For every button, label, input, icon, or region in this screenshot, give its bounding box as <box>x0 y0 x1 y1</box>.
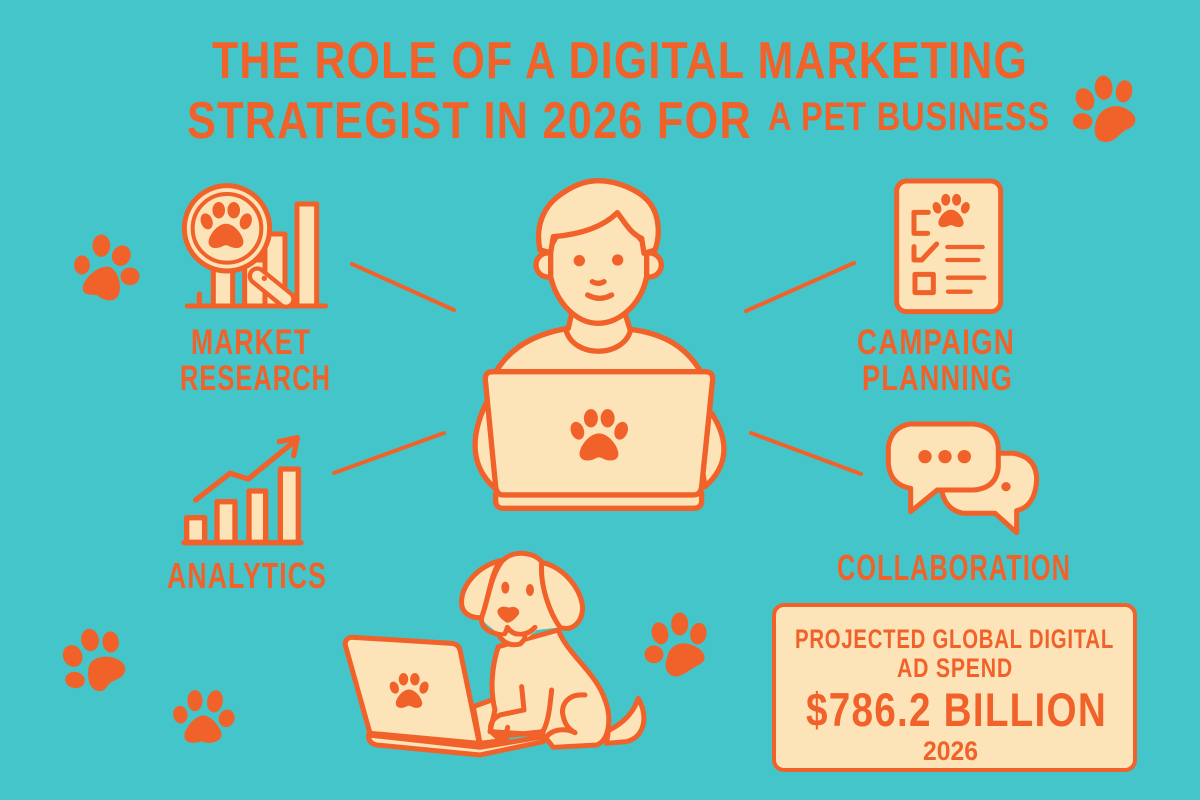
label: campaign planning <box>857 323 1015 398</box>
title: STRATEGIST IN 2026 FOR <box>187 92 752 150</box>
icon: market research <box>184 186 326 306</box>
callout: projected global digital ad spend: 2026 <box>923 736 978 766</box>
callout: projected global digital ad spend: AD SPEND <box>897 653 1013 683</box>
label: market research: RESEARCH <box>180 359 331 398</box>
label: campaign planning: CAMPAIGN <box>857 323 1015 362</box>
illustration: dog with laptop <box>345 553 644 755</box>
icon: collaboration speech bubbles <box>888 424 1037 533</box>
icon: strategist at laptop <box>475 181 724 508</box>
connector lines <box>334 263 861 474</box>
callout: projected global digital ad spend: $786.2 BILLION <box>806 683 1107 736</box>
label: analytics: ANALYTICS <box>167 555 327 596</box>
icon: paw bottom left large <box>60 628 125 691</box>
icon: paw beside dog <box>645 613 708 676</box>
label: market research: MARKET <box>191 323 311 362</box>
label: market research <box>180 323 331 398</box>
icon: paw top right <box>1073 75 1135 142</box>
icon: paw bottom left small <box>172 690 236 742</box>
icon: campaign checklist <box>897 181 1001 312</box>
title: THE ROLE OF A DIGITAL MARKETING <box>212 32 1028 90</box>
title <box>187 32 1050 150</box>
callout: projected global digital ad spend <box>774 605 1135 770</box>
label: campaign planning: PLANNING <box>862 359 1013 398</box>
title: A PET BUSINESS <box>768 95 1050 139</box>
icon: paw left <box>75 235 139 300</box>
icon: analytics <box>184 438 301 543</box>
label: collaboration: COLLABORATION <box>837 547 1071 588</box>
